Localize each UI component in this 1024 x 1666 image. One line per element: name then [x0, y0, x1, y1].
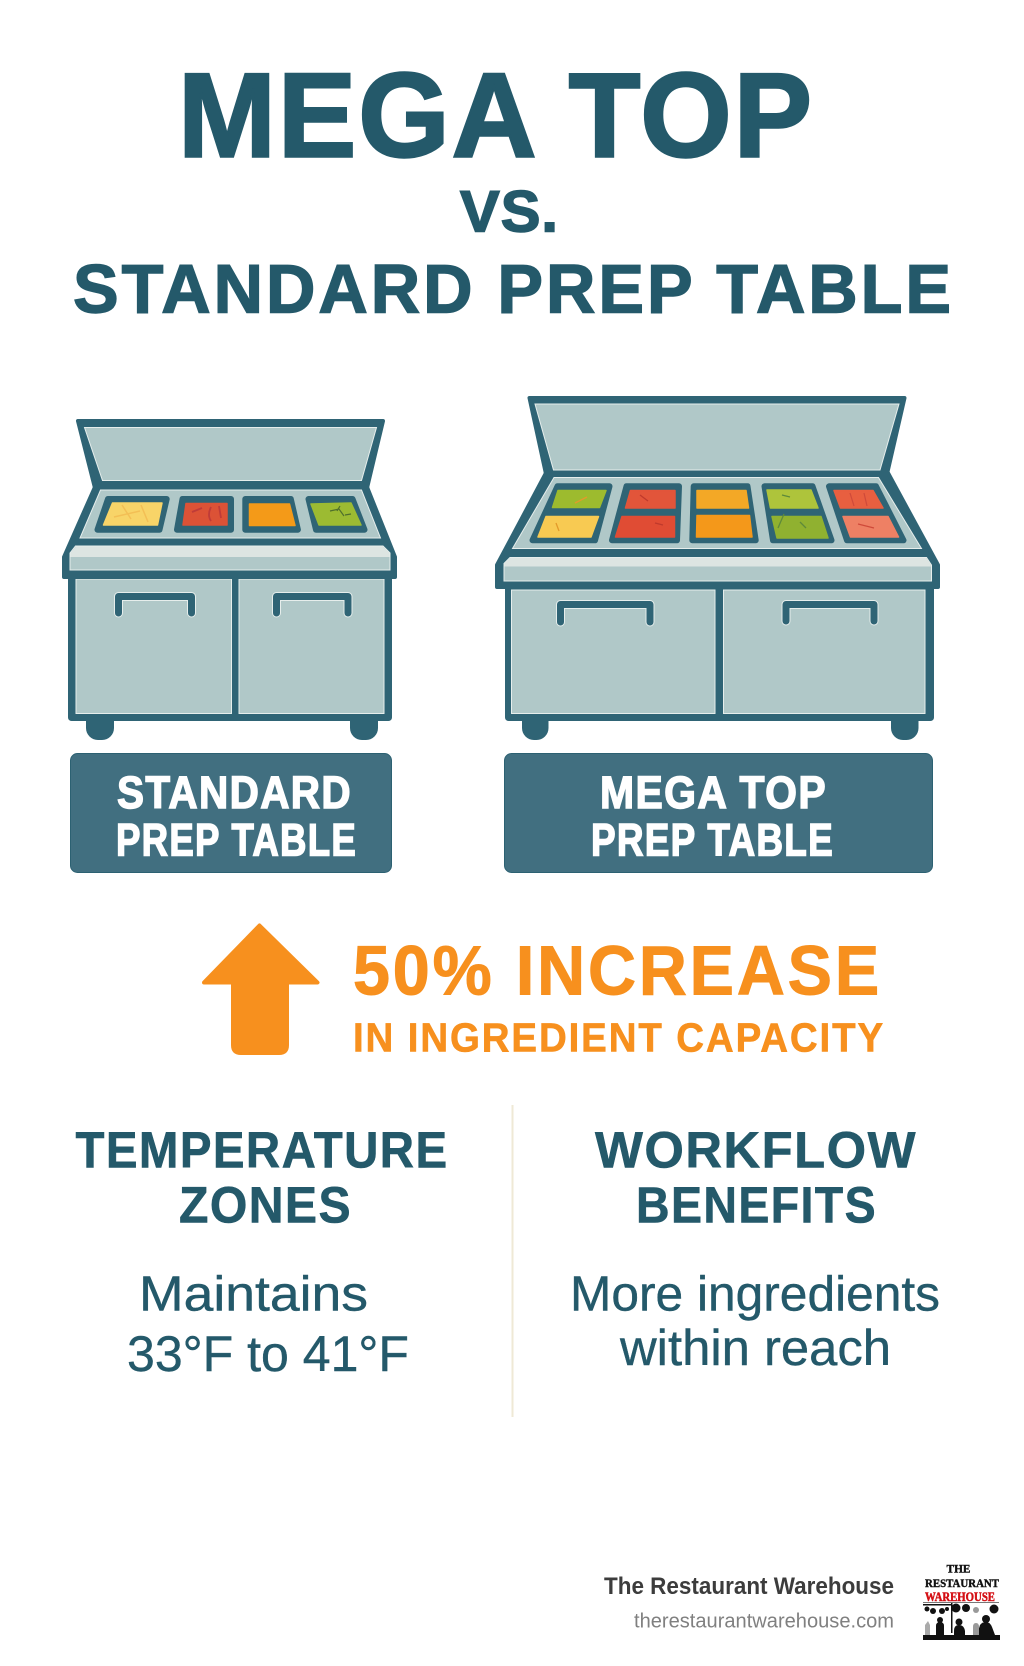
text: workflow benefit: More ingredients — [570, 1268, 940, 1322]
icon: restaurant warehouse logo — [923, 1562, 1000, 1640]
text: workflow benefit: within reach — [619, 1320, 891, 1376]
icon: restaurant warehouse logo: WAREHOUSE — [925, 1589, 995, 1604]
door handles — [560, 604, 874, 622]
footer: brand text: therestaurantwarehouse.com — [634, 1610, 894, 1632]
icon: restaurant warehouse logo: THE — [946, 1562, 970, 1576]
food pans — [98, 499, 364, 530]
label: mega top prep table — [504, 754, 932, 872]
food pans — [532, 486, 904, 540]
callout: 50% increase in ingredient capacity — [353, 932, 885, 1060]
ingredient well and counter — [497, 473, 938, 587]
heading: temperature zones — [76, 1121, 448, 1233]
text: workflow benefit — [570, 1268, 940, 1376]
label: mega top prep table: MEGA TOP — [600, 767, 827, 818]
text: temperature range: Maintains — [139, 1268, 368, 1322]
label: standard prep table: STANDARD — [117, 767, 352, 818]
icon: orange up arrow — [204, 926, 318, 1053]
heading: temperature zones: TEMPERATURE — [76, 1121, 448, 1178]
heading: workflow benefits: WORKFLOW — [595, 1121, 917, 1178]
wheels — [86, 716, 378, 740]
title: MEGA TOP — [178, 48, 814, 182]
text: temperature range: 33°F to 41°F — [127, 1325, 409, 1382]
label: mega top prep table: PREP TABLE — [591, 814, 834, 866]
illustration: mega top prep table — [497, 398, 938, 740]
title: STANDARD PREP TABLE — [73, 250, 954, 328]
icon: restaurant warehouse logo: RESTAURANT — [925, 1576, 999, 1590]
lid — [78, 421, 383, 488]
title: VS. — [460, 180, 559, 244]
panel: temperature zones — [76, 1121, 448, 1382]
illustration: standard prep table — [64, 421, 395, 740]
label: standard prep table: PREP TABLE — [116, 814, 357, 866]
footer: brand text — [604, 1573, 894, 1632]
text: temperature range — [127, 1268, 409, 1382]
callout: 50% increase in ingredient capacity: 50% INCREASE — [353, 932, 882, 1010]
wheels — [522, 716, 918, 740]
body and doors — [70, 574, 390, 719]
heading: workflow benefits — [595, 1121, 917, 1233]
body and doors — [507, 584, 932, 719]
lid — [530, 398, 904, 474]
footer: brand text: The Restaurant Warehouse — [604, 1573, 894, 1600]
panel: workflow benefits — [570, 1121, 940, 1376]
ingredient well and counter — [64, 487, 395, 577]
door handles — [118, 596, 348, 613]
heading: temperature zones: ZONES — [179, 1176, 352, 1233]
title — [73, 48, 954, 328]
label: standard prep table — [70, 754, 392, 872]
callout: 50% increase in ingredient capacity: IN INGREDIENT CAPACITY — [353, 1014, 885, 1060]
heading: workflow benefits: BENEFITS — [636, 1176, 877, 1233]
